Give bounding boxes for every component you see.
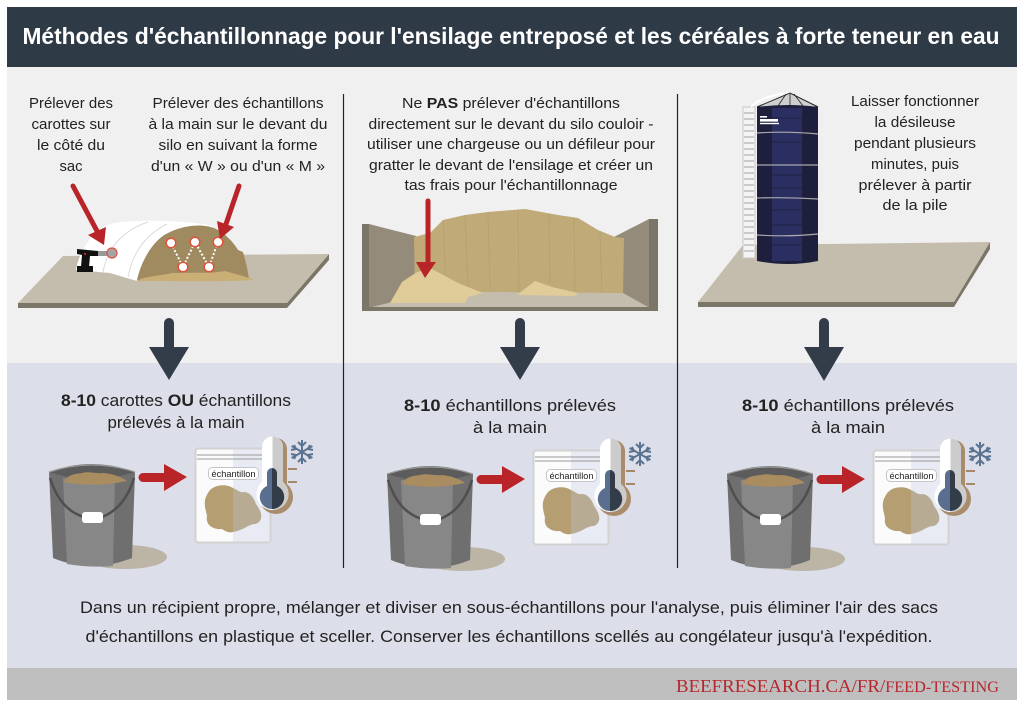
heading: column 3 sample count — [742, 397, 954, 437]
footer bar with URL — [7, 668, 1017, 700]
text: core samples instruction — [29, 96, 113, 175]
icon: snowflake — [291, 440, 313, 464]
footer bar with URL: BEEFRESEARCH.CA/FR/ FEED-TESTING — [676, 676, 999, 696]
ground slab — [698, 242, 990, 307]
panel: column 2 bunker silo — [362, 96, 658, 380]
arrow: red to silage pile — [416, 201, 436, 278]
icon: snowflake — [629, 442, 651, 466]
arrow: dark down — [500, 318, 540, 380]
text: do not sample directly: Ne PAS prélever d'échantillons — [402, 96, 620, 112]
text: run unloader instruction: Laisser fonctionner — [851, 94, 979, 110]
heading: column 3 sample count: à la main — [811, 419, 885, 437]
icon: bucket — [49, 464, 167, 569]
text: core samples instruction: Prélever des — [29, 96, 113, 112]
text: hand samples instruction: d'un « W » ou d'un « M » — [151, 159, 325, 175]
text: hand samples instruction: silo en suivant la forme — [158, 138, 318, 154]
icon: core drill — [77, 248, 117, 272]
text: core samples instruction: carottes sur — [32, 117, 111, 133]
icon: sample bag — [874, 450, 948, 544]
panel: column 1 bag silo — [18, 96, 329, 380]
text: do not sample directly — [367, 96, 655, 194]
header bar with title: Méthodes d'échantillonnage pour l'ensilage entreposé et les céréales à forte teneur en eau — [22, 23, 1000, 49]
text: core samples instruction: sac — [60, 159, 82, 175]
icon: sample bag: échantillon — [550, 471, 594, 482]
text: mixing and storage instructions: Dans un récipient propre, mélanger et diviser en sous-échantillons pour l'analyse, puis éliminer l'air des sacs — [80, 599, 938, 617]
arrow: red to silo face — [217, 186, 239, 239]
icon: thermometer — [256, 436, 297, 514]
icon: tower silo — [743, 93, 818, 264]
text: hand samples instruction: à la main sur le devant du — [148, 117, 328, 133]
text: do not sample directly: gratter le devant de l'ensilage et créer un — [369, 158, 653, 174]
arrow: dark down — [149, 318, 189, 380]
text: run unloader instruction: minutes, puis — [871, 157, 959, 173]
ground slab — [18, 254, 329, 308]
panel: upper light background — [7, 67, 1017, 363]
header bar with title — [7, 7, 1017, 67]
text: hand samples instruction — [148, 96, 328, 175]
icon: bucket — [727, 466, 845, 571]
text: core samples instruction: le côté du — [37, 138, 105, 154]
icon: sample bag: échantillon — [890, 471, 934, 482]
arrow: red to bag — [138, 464, 187, 491]
icon: thermometer — [594, 438, 635, 516]
text: hand samples instruction: Prélever des échantillons — [152, 96, 324, 112]
heading: column 1 sample count — [61, 392, 291, 432]
illustration: column 1 bucket to sample bag — [49, 436, 313, 569]
text: do not sample directly: utiliser une chargeuse ou un défileur pour — [367, 137, 655, 153]
text: do not sample directly: tas frais pour l'échantillonnage — [404, 178, 618, 194]
text: run unloader instruction: de la pile — [882, 198, 948, 214]
icon: sample bag: échantillon — [212, 469, 256, 480]
heading: column 3 sample count: 8-10 échantillons prélevés — [742, 397, 954, 415]
text: run unloader instruction: prélever à partir — [858, 178, 972, 194]
text: run unloader instruction: pendant plusieurs — [854, 136, 976, 152]
icon: thermometer — [934, 438, 975, 516]
text: run unloader instruction: la désileuse — [874, 115, 956, 131]
heading: column 2 sample count: à la main — [473, 419, 547, 437]
heading: column 1 sample count: 8-10 carottes OU échantillons — [61, 392, 291, 410]
text: do not sample directly: directement sur le devant du silo couloir - — [368, 117, 654, 133]
text: mixing and storage instructions — [80, 599, 938, 646]
arrow: red to bag — [816, 466, 865, 493]
heading: column 1 sample count: prélevés à la main — [108, 414, 244, 432]
illustration: column 2 bucket to sample bag — [387, 438, 651, 571]
icon: snowflake — [969, 442, 991, 466]
icon: bucket — [387, 466, 505, 571]
illustration: column 3 bucket to sample bag — [727, 438, 991, 571]
text: mixing and storage instructions: d'échantillons en plastique et sceller. Conserver les échantillons scellés au congélateur jusqu'à l'expédition. — [86, 628, 932, 646]
icon: bunker with silage — [362, 209, 658, 311]
arrow: dark down — [804, 318, 844, 381]
icon: sample bag — [534, 450, 608, 544]
icon: silage bag — [76, 221, 254, 281]
icon: sample bag — [196, 448, 270, 542]
text: run unloader instruction — [851, 94, 979, 214]
arrow: red to bag — [476, 466, 525, 493]
heading: column 2 sample count: 8-10 échantillons prélevés — [404, 397, 616, 415]
arrow: red to bag side — [73, 186, 106, 245]
heading: column 2 sample count — [404, 397, 616, 437]
panel: column 3 tower silo — [698, 93, 990, 381]
panel: lower blue background — [7, 363, 1017, 668]
